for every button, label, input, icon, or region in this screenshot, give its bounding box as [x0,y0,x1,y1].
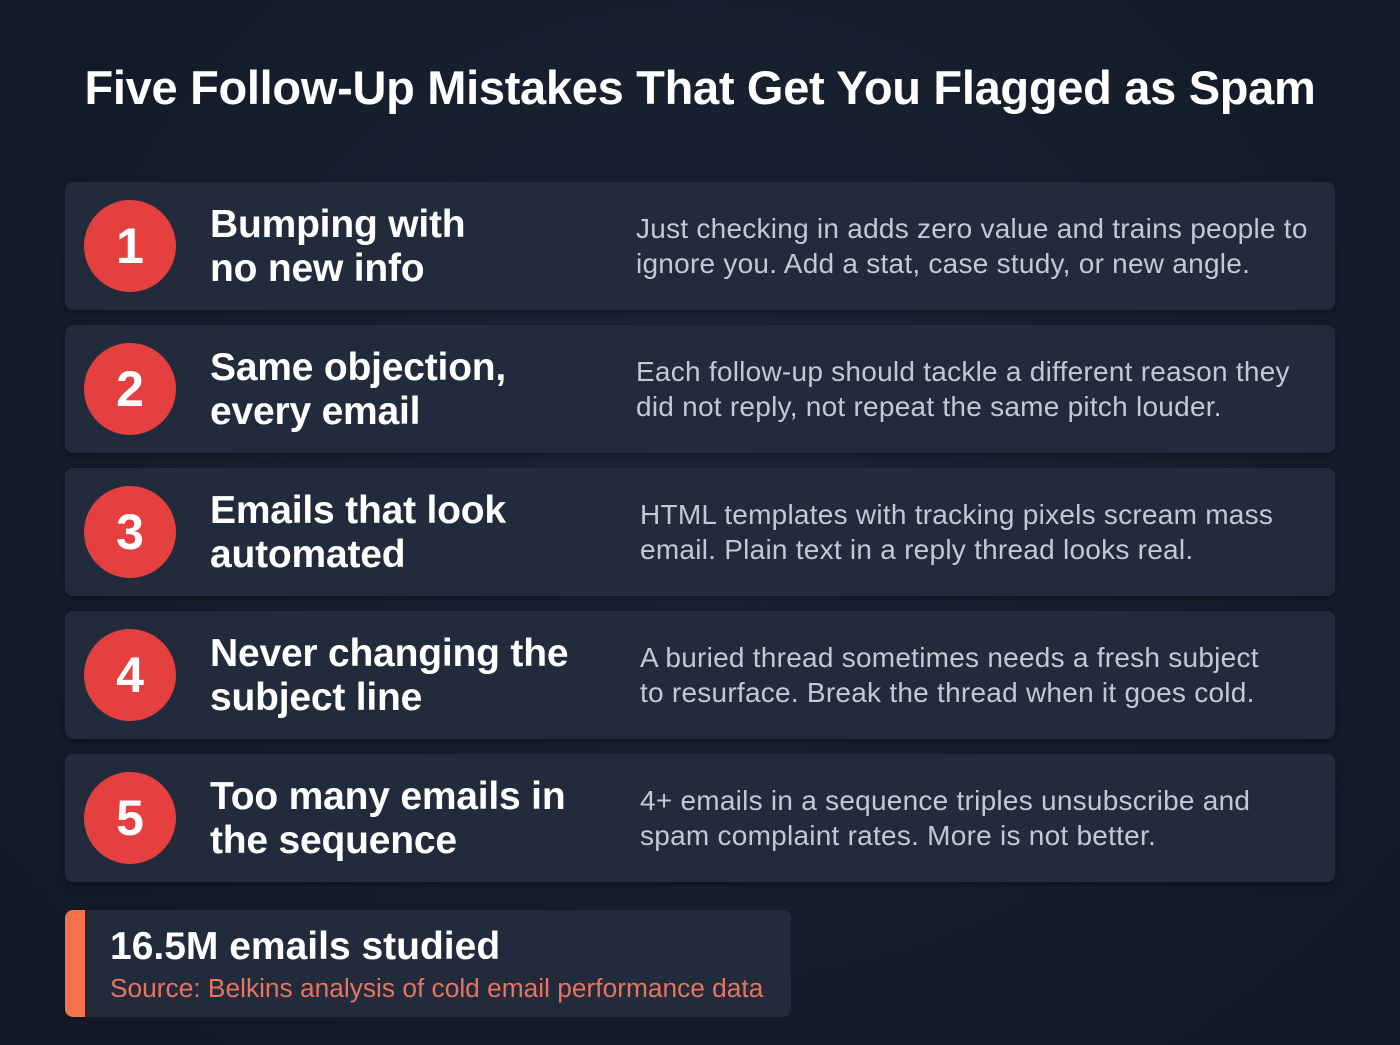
source text: Source: Belkins analysis of cold email performance data [110,973,763,1003]
heading 5: the sequence [210,819,457,862]
heading 5 [210,775,565,862]
heading 1: Bumping with [210,203,465,246]
icon: number 1: 1 [116,218,144,274]
panel: mistake 3 [65,468,1335,596]
description 1 [636,213,1308,279]
heading 2: Same objection, [210,346,506,389]
icon: number 1 [84,200,176,292]
description 4: to resurface. Break the thread when it goes cold. [640,677,1255,708]
icon: number 2: 2 [116,361,144,417]
description 4 [640,642,1259,708]
description 2: did not reply, not repeat the same pitch louder. [636,391,1222,422]
heading 3 [210,489,506,576]
description 3 [640,499,1273,565]
title: Five Follow-Up Mistakes That Get You Flagged as Spam [84,61,1316,114]
description 5: 4+ emails in a sequence triples unsubscribe and [640,785,1250,816]
heading 5: Too many emails in [210,775,565,818]
panel: mistake 5 [65,754,1335,882]
icon: number 2 [84,343,176,435]
icon: number 5: 5 [116,790,144,846]
icon: number 4 [84,629,176,721]
icon: number 4: 4 [116,647,144,703]
description 5 [640,785,1250,851]
panel: mistake 2 [65,325,1335,453]
description 1: Just checking in adds zero value and trains people to [636,213,1308,244]
heading 3: Emails that look [210,489,506,532]
heading 1: no new info [210,247,424,290]
description 2: Each follow-up should tackle a different reason they [636,356,1290,387]
description 2 [636,356,1290,422]
heading 4 [210,632,568,719]
heading 4: Never changing the [210,632,568,675]
heading 1 [210,203,465,290]
heading 2 [210,346,506,433]
description 3: HTML templates with tracking pixels scream mass [640,499,1273,530]
heading 3: automated [210,533,405,576]
description 4: A buried thread sometimes needs a fresh subject [640,642,1259,673]
panel: mistake 1 [65,182,1335,310]
icon: number 3: 3 [116,504,144,560]
description 5: spam complaint rates. More is not better. [640,820,1156,851]
heading 4: subject line [210,676,422,719]
description 1: ignore you. Add a stat, case study, or new angle. [636,248,1250,279]
icon: number 5 [84,772,176,864]
panel: mistake 4 [65,611,1335,739]
description 3: email. Plain text in a reply thread looks real. [640,534,1193,565]
heading 2: every email [210,390,420,433]
stat heading: 16.5M emails studied [110,925,500,968]
icon: number 3 [84,486,176,578]
callout: source [65,910,791,1017]
